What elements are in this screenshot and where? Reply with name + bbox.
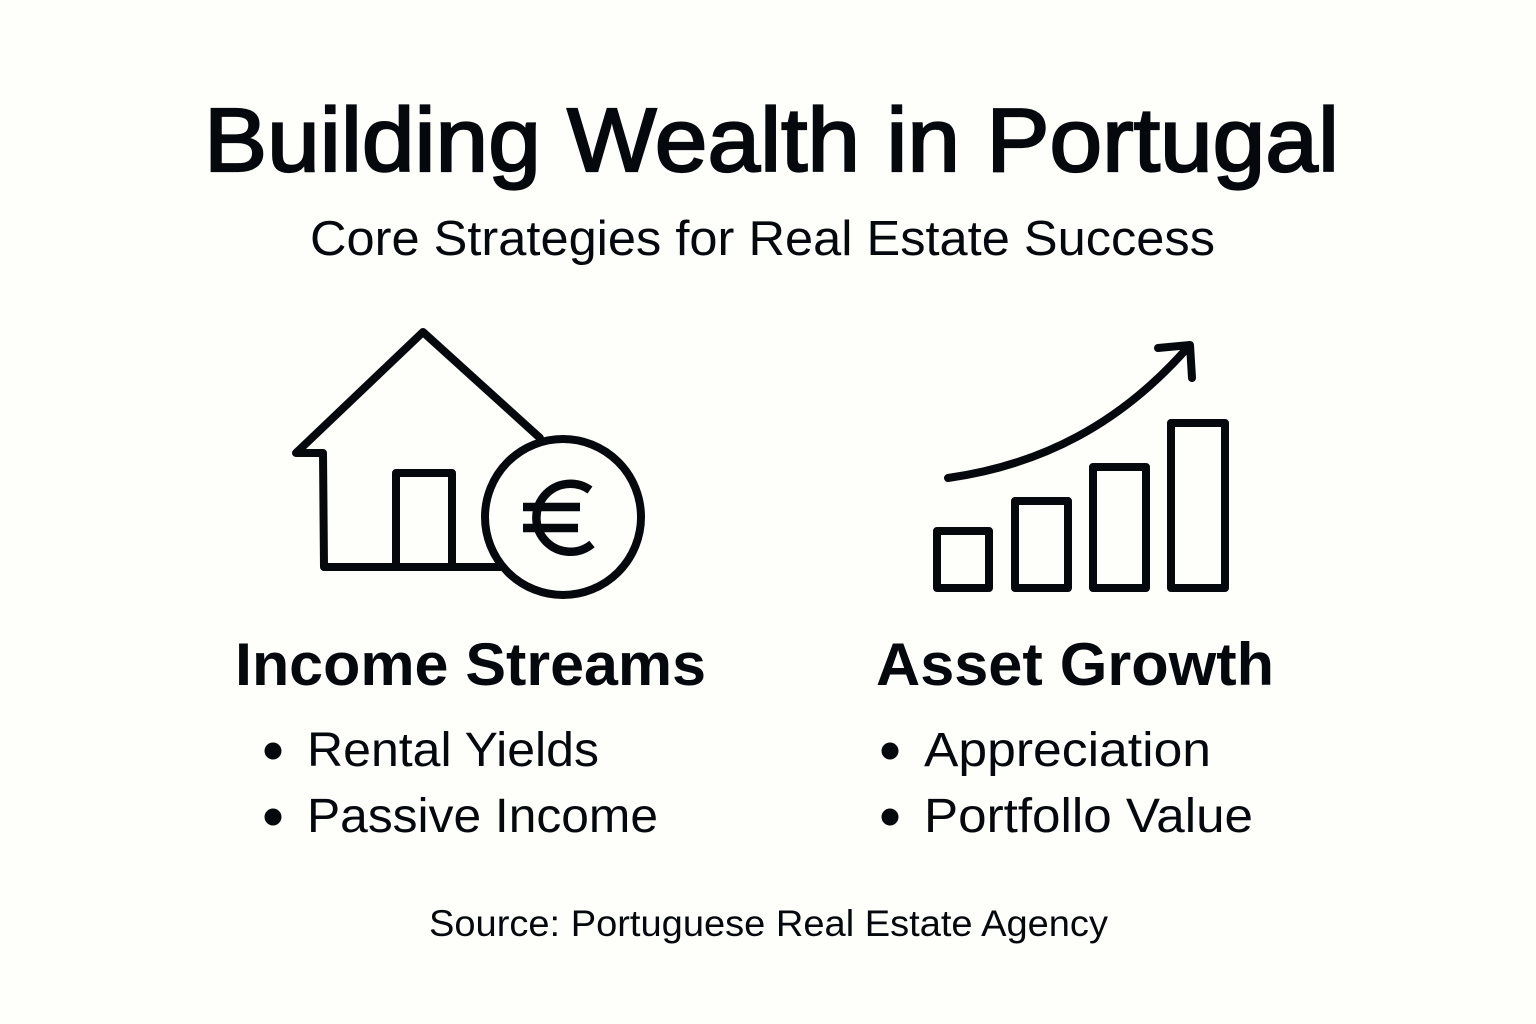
panel: income streams [235, 332, 706, 843]
coin [485, 439, 641, 595]
list: income streams: Rental Yields [307, 724, 599, 777]
source note: Source: Portuguese Real Estate Agency [429, 903, 1109, 944]
icon: house with euro coin [296, 332, 641, 595]
rising arrow [948, 345, 1192, 478]
list: asset growth [882, 724, 1253, 843]
house outline [296, 332, 540, 567]
list: income streams: Passive Income [307, 790, 658, 843]
bars [937, 423, 1225, 588]
list: asset growth: Portfollo Value [924, 790, 1253, 843]
heading: income streams: Income Streams [235, 631, 706, 698]
list: asset growth: Appreciation [924, 724, 1211, 777]
euro sign [523, 484, 592, 552]
subtitle: Core Strategies for Real Estate Success [310, 212, 1215, 266]
door [396, 473, 452, 567]
heading: asset growth: Asset Growth [876, 631, 1274, 698]
list: income streams [264, 724, 658, 843]
icon: bar chart with rising arrow [937, 345, 1225, 588]
title: Building Wealth in Portugal [204, 91, 1339, 191]
panel: asset growth [876, 345, 1274, 843]
